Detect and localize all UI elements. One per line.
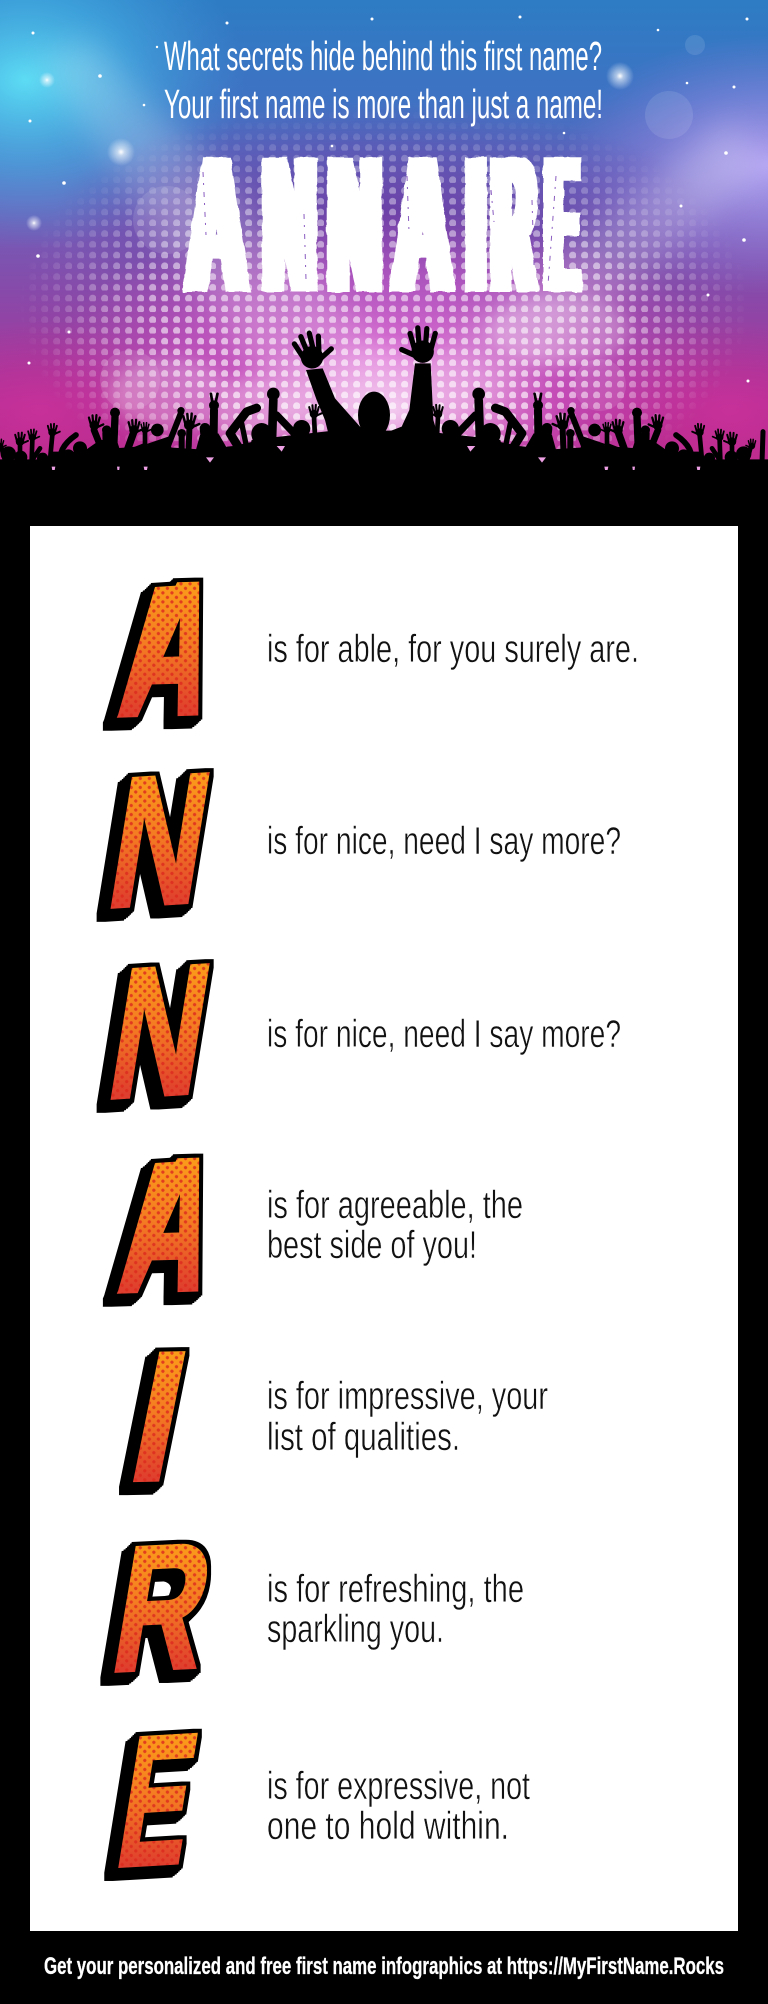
heading: first name: N <box>329 116 380 332</box>
text: A line: is for agreeable, the <box>267 1184 523 1227</box>
heading: first name: A <box>394 116 451 332</box>
text: N line: is for nice, need I say more? <box>267 820 621 863</box>
text: A line: is for able, for you surely are. <box>267 628 639 671</box>
text: A line: best side of you! <box>267 1224 477 1267</box>
text: R line: is for refreshing, the <box>267 1568 524 1611</box>
text: I line <box>267 1375 548 1459</box>
heading: first name: N <box>264 116 315 332</box>
text: E line: is for expressive, not <box>267 1765 530 1808</box>
letter: A <box>102 1154 204 1307</box>
text: R line <box>267 1568 524 1651</box>
text: I line: is for impressive, your <box>267 1375 548 1418</box>
text: E <box>547 116 577 332</box>
heading: first name: A <box>187 116 246 332</box>
text: A line <box>267 1184 523 1267</box>
text: R line: sparkling you. <box>267 1608 444 1651</box>
crowd silhouette <box>0 328 768 530</box>
letter: A <box>102 578 204 731</box>
letter: N <box>96 959 214 1113</box>
text: N line: is for nice, need I say more? <box>267 1013 621 1056</box>
text: E line <box>267 1765 530 1848</box>
heading: first name <box>187 116 577 332</box>
panel: hero background <box>0 0 768 510</box>
letter: I <box>119 1347 190 1496</box>
heading: first name: I <box>468 116 484 332</box>
panel: acrostic white card <box>30 526 738 1931</box>
letter: R <box>100 1540 212 1686</box>
text: E line: one to hold within. <box>267 1805 509 1848</box>
heading: first name: R <box>493 116 534 332</box>
letter: N <box>96 768 214 922</box>
text: I line: list of qualities. <box>267 1416 460 1459</box>
letter: E <box>104 1728 202 1881</box>
